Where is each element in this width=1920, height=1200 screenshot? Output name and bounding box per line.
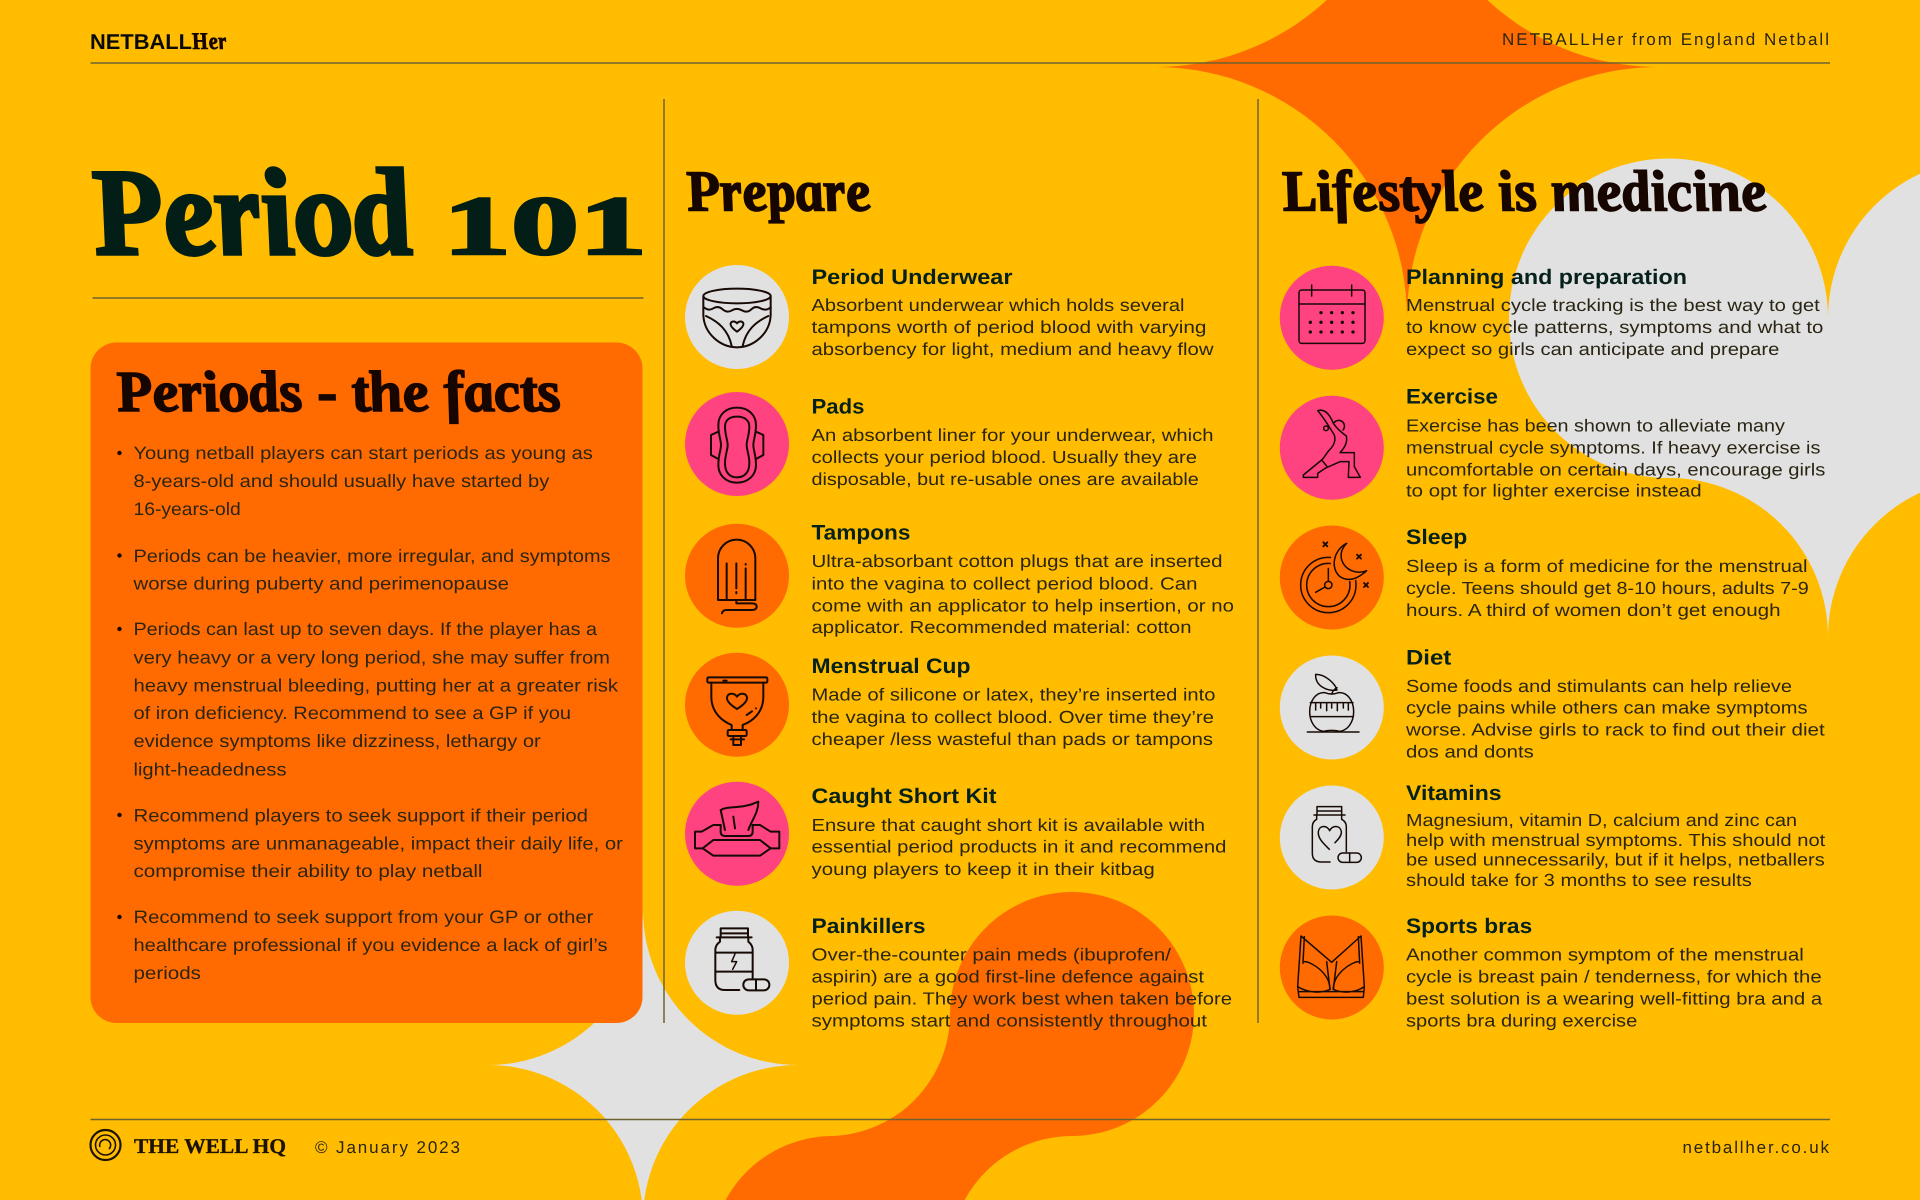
icon: pill bottle [685, 911, 789, 1015]
heading: Prepare: Prepare [677, 158, 877, 224]
description [812, 815, 1226, 879]
description: into the vagina to collect period blood. Can [812, 573, 1198, 593]
item: Pads [685, 392, 1214, 496]
description: worse. Advise girls to rack to find out their diet [1405, 720, 1825, 740]
heading: Planning and preparation [1406, 266, 1687, 289]
description: Absorbent underwear which holds several [812, 295, 1184, 315]
description [812, 944, 1232, 1031]
description [812, 551, 1234, 637]
icon: menstrual cup [685, 653, 789, 757]
description: to know cycle patterns, symptoms and what to [1406, 317, 1823, 337]
description: expect so girls can anticipate and prepare [1406, 339, 1779, 359]
description [1406, 295, 1823, 359]
icon: vitamin jar [1280, 786, 1384, 890]
bullet: duration [117, 619, 619, 780]
heading: Lifestyle is medicine: Lifestyle is medicine [1272, 158, 1773, 224]
description: should take for 3 months to see results [1406, 870, 1752, 890]
heading: Pads [812, 395, 864, 418]
description: help with menstrual symptoms. This should not [1406, 830, 1825, 850]
heading: Tampons [812, 522, 910, 545]
description: to opt for lighter exercise instead [1406, 481, 1702, 501]
bullet: duration: of iron deficiency. Recommend to see a GP if you [134, 703, 571, 723]
title: Period [74, 144, 427, 281]
bullet: GP: healthcare professional if you evidence a lack of girl’s [134, 935, 608, 955]
description: cycle is breast pain / tenderness, for which the [1406, 967, 1822, 987]
bullet: starting age: Young netball players can start periods as young as [134, 443, 593, 463]
description: come with an applicator to help insertion, or no [812, 596, 1234, 616]
logo: NETBALLHer [90, 29, 230, 55]
description: Magnesium, vitamin D, calcium and zinc can [1406, 810, 1797, 830]
heading: Vitamins [1406, 782, 1502, 805]
description: Ultra-absorbant cotton plugs that are inserted [812, 551, 1222, 571]
description: Menstrual cycle tracking is the best way to get [1406, 295, 1820, 315]
description: Over-the-counter pain meds (ibuprofen/ [812, 944, 1171, 964]
description: Ensure that caught short kit is available with [812, 815, 1205, 835]
bullet: seek support: compromise their ability to play netball [134, 861, 482, 881]
bullet: duration: heavy menstrual bleeding, putting her at a greater risk [134, 676, 619, 696]
icon: underwear [685, 265, 789, 369]
description: An absorbent liner for your underwear, which [812, 425, 1214, 445]
title [74, 144, 647, 281]
description: period pain. They work best when taken before [812, 988, 1232, 1008]
icon: calendar [1280, 266, 1384, 370]
description: best solution is a wearing well-fitting bra and a [1406, 988, 1822, 1008]
item: Planning and preparation [1280, 266, 1823, 370]
bullet: starting age: 8-years-old and should usually have started by [134, 471, 549, 491]
icon: apple with tape [1280, 656, 1384, 760]
description [1406, 944, 1822, 1031]
heading: Sports bras [1406, 915, 1532, 938]
footer date: © January 2023 [315, 1138, 460, 1157]
icon: yoga pose [1280, 396, 1384, 500]
item: Menstrual Cup [685, 653, 1215, 757]
heading: Periods - the facts: Periods - the facts [107, 359, 567, 424]
item: Vitamins [1280, 782, 1825, 890]
description: Another common symptom of the menstrual [1406, 944, 1804, 964]
item: Sleep [1280, 526, 1809, 630]
description [1405, 676, 1825, 761]
background: grey blob [1509, 158, 1920, 637]
bullet: starting age: 16-years-old [134, 499, 241, 519]
description: absorbency for light, medium and heavy flow [812, 339, 1214, 359]
item: Tampons [685, 522, 1234, 637]
icon: tampon [685, 524, 789, 628]
description: sports bra during exercise [1406, 1011, 1637, 1031]
description [1406, 415, 1826, 501]
description: cycle pains while others can make symptoms [1406, 698, 1808, 718]
heading: Caught Short Kit [812, 785, 997, 808]
bullet: duration: Periods can last up to seven days. If the player has a [134, 619, 598, 639]
item: Painkillers [685, 911, 1232, 1031]
item: Sports bras [1280, 915, 1822, 1031]
title: 101 [443, 180, 647, 273]
description: menstrual cycle symptoms. If heavy exercise is [1406, 438, 1821, 458]
icon: moon and clock [1280, 526, 1384, 630]
background: orange blob [711, 892, 1194, 1200]
description: Made of silicone or latex, they’re inserted into [812, 685, 1215, 705]
description: Sleep is a form of medicine for the menstrual [1406, 556, 1808, 576]
description [812, 295, 1214, 359]
bullet: starting age [117, 443, 593, 519]
logo: NETBALLHer: Her [188, 29, 230, 55]
bullet: seek support [117, 806, 623, 881]
item: Period Underwear [685, 265, 1214, 369]
description: uncomfortable on certain days, encourage girls [1406, 459, 1826, 479]
bullet: seek support: symptoms are unmanageable, impact their daily life, or [134, 834, 623, 854]
bullet: GP: periods [134, 963, 201, 983]
bullet: puberty: Periods can be heavier, more irregular, and symptoms [134, 546, 610, 566]
bullet: GP: Recommend to seek support from your GP or other [134, 907, 593, 927]
header strapline: NETBALLHer from England Netball [1502, 30, 1829, 49]
bullet: duration: very heavy or a very long period, she may suffer from [134, 648, 610, 668]
icon: pad [685, 392, 789, 496]
description: aspirin) are a good first-line defence against [812, 967, 1204, 987]
item: Exercise [1280, 385, 1826, 501]
item: Caught Short Kit [685, 782, 1226, 886]
icon: sports bra [1280, 916, 1384, 1020]
description: disposable, but re-usable ones are available [812, 469, 1199, 489]
description: young players to keep it in their kitbag [812, 859, 1155, 879]
heading: Painkillers [812, 915, 926, 938]
heading: Menstrual Cup [812, 655, 970, 678]
description: the vagina to collect blood. Over time they’re [812, 707, 1214, 727]
description: symptoms start and consistently throughout [812, 1011, 1207, 1031]
bullet: puberty: worse during puberty and perimenopause [132, 574, 509, 594]
bullet: puberty [117, 546, 611, 594]
heading: Diet [1406, 646, 1451, 669]
description: hours. A third of women don’t get enough [1406, 600, 1781, 620]
description: cheaper /less wasteful than pads or tampons [812, 729, 1213, 749]
background: grey star [487, 910, 798, 1200]
logo: NETBALLHer: NETBALL [90, 30, 192, 54]
description: Some foods and stimulants can help relieve [1406, 676, 1792, 696]
item: Diet [1280, 646, 1825, 761]
panel: periods facts [90, 342, 642, 1023]
bullet: seek support: Recommend players to seek support if their period [134, 806, 588, 826]
description [1406, 810, 1825, 890]
heading: Sleep [1406, 526, 1467, 549]
footer url: netballher.co.uk [1682, 1138, 1830, 1157]
description: tampons worth of period blood with varying [812, 317, 1206, 337]
background: orange star [1156, 0, 1658, 318]
description: dos and donts [1406, 741, 1534, 761]
bullet: duration: light-headedness [134, 760, 286, 780]
icon: wipes pack [685, 782, 789, 886]
bullet: GP [117, 907, 608, 983]
description: be used unnecessarily, but if it helps, netballers [1406, 850, 1825, 870]
footer logo: The Well HQ: THE WELL HQ [134, 1134, 286, 1158]
description: essential period products in it and recommend [812, 837, 1226, 857]
description: applicator. Recommended material: cotton [812, 617, 1192, 637]
bullet: duration: evidence symptoms like dizziness, lethargy or [134, 731, 541, 751]
description: collects your period blood. Usually they are [812, 447, 1197, 467]
footer logo: The Well HQ [90, 1130, 286, 1160]
description [1406, 556, 1809, 620]
heading: Period Underwear [812, 266, 1012, 289]
description [812, 685, 1215, 749]
description: cycle. Teens should get 8-10 hours, adults 7-9 [1406, 578, 1809, 598]
description: Exercise has been shown to alleviate many [1406, 415, 1785, 435]
description [812, 425, 1214, 489]
heading: Exercise [1406, 385, 1498, 408]
